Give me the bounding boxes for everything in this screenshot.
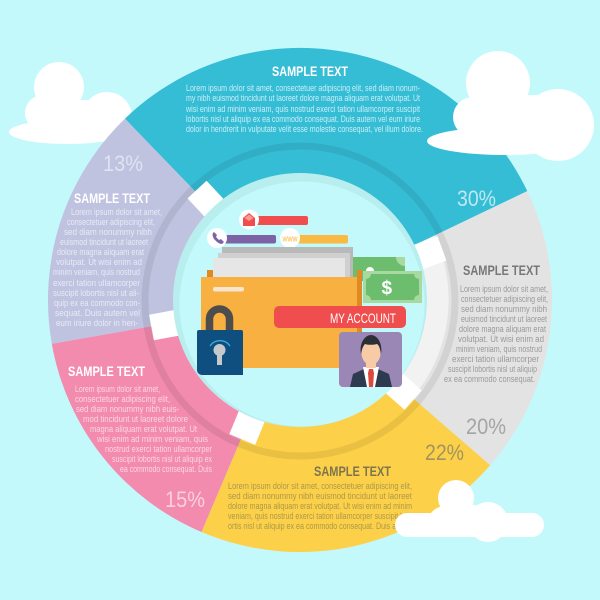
icon: banknotes: $ — [382, 278, 392, 299]
percentage: 22%: 22% — [425, 440, 464, 465]
text block: yellow panel: sed diam nonummy nibh euismod tincidunt ut laoreet — [228, 491, 412, 501]
text block: pink panel: wisi enim ad minim veniam, quis — [96, 434, 208, 444]
heading: lavender panel: SAMPLE TEXT — [74, 190, 150, 206]
heading: grey panel: SAMPLE TEXT — [463, 262, 540, 278]
icon: papers — [213, 247, 353, 277]
avatar — [339, 332, 402, 387]
text block: grey panel: consectetuer adipiscing elit, — [461, 294, 548, 304]
text block: grey panel: suscipit lobortis nisl ut aliquip — [448, 364, 537, 374]
inner ring with tabs — [145, 146, 455, 456]
text block: lavender panel — [53, 207, 162, 328]
text block: grey panel: dolore magna aliquam erat — [459, 324, 546, 334]
text block: teal panel: dolor in hendrerit in vulputate velit esse molestie consequat, vel illum dolore. — [186, 124, 423, 134]
text block: teal panel — [185, 83, 423, 134]
heading: teal panel: SAMPLE TEXT — [272, 63, 348, 79]
text block: teal panel: wisi enim ad minim veniam, quis nostrud exerci tation ullamcorper suscipit — [185, 104, 420, 114]
text block: pink panel: sed diam nonummy nibh euis- — [76, 404, 179, 414]
text block: yellow panel: Lorem ipsum dolor sit amet, consectetuer adipiscing elit, — [228, 481, 412, 491]
text block: teal panel: my nibh euismod tincidunt ut laoreet dolore magna aliquam erat volutpat. Ut — [186, 93, 420, 103]
text block: grey panel: Lorem ipsum dolor sit amet, — [460, 284, 548, 294]
panel: pink 15% — [52, 300, 300, 532]
text block: grey panel: minim veniam, quis nostrud — [456, 344, 542, 354]
text block: lavender panel: minim veniam, quis nostrud — [53, 267, 140, 277]
icon: phone label — [207, 228, 276, 248]
heading: yellow panel: SAMPLE TEXT — [314, 463, 391, 479]
text block: lavender panel: dolore magna aliquam erat — [57, 247, 144, 257]
text block: grey panel: euismod tincidunt ut laoreet — [461, 314, 547, 324]
text block: yellow panel: veniam, quis nostrud exerci tation ullamcorper suscipit lob- — [228, 511, 412, 521]
percentage: 15%: 15% — [165, 487, 205, 512]
icon: envelope label — [239, 210, 308, 230]
text block: grey panel: volutpat. Ut wisi enim ad — [458, 334, 544, 344]
text block: lavender panel: Lorem ipsum dolor sit amet, — [71, 207, 162, 217]
text block: teal panel: lobortis nisl ut aliquip ex ea commodo consequat. Duis autem vel eum iriure — [186, 114, 420, 124]
text block: lavender panel: suscipit lobortis nisl ut ali- — [53, 288, 139, 298]
cloud: top left — [9, 62, 132, 144]
text block: pink panel: mod tincidunt ut laoreet dolore — [83, 414, 188, 424]
text block: pink panel: nostrud exerci tation ullamcorper — [105, 444, 212, 454]
text block: pink panel: suscipit lobortis nisl ut aliquip ex — [112, 454, 212, 464]
percentage: 30%: 30% — [457, 186, 496, 211]
text block: lavender panel: euismod tincidunt ut laoreet — [60, 237, 148, 247]
panel: lavender 13% — [48, 119, 300, 344]
panel: grey 20% — [300, 191, 552, 465]
text block: lavender panel: sed diam nonummy nibh — [64, 227, 152, 237]
percentage: 20%: 20% — [466, 414, 506, 439]
icon: folder — [201, 270, 362, 368]
text block: grey panel: sed diam nonummy nibh — [461, 304, 547, 314]
my account banner: MY ACCOUNT — [330, 310, 396, 326]
text block: lavender panel: consectetuer adipiscing elit, — [67, 217, 155, 227]
text block: lavender panel: quip ex ea commodo con- — [54, 298, 140, 308]
text block: lavender panel: eum iriure dolor in hen- — [56, 318, 138, 328]
text block: grey panel: ex ea commodo consequat. — [444, 374, 535, 384]
my account banner — [274, 306, 406, 328]
text block: teal panel: Lorem ipsum dolor sit amet, consectetuer adipiscing elit, sed diam nonum- — [186, 83, 420, 93]
text block: yellow panel: dolore magna aliquam erat volutpat. Ut wisi enim ad minim — [228, 501, 412, 511]
text block: yellow panel — [228, 481, 412, 531]
panel: yellow 22% — [202, 300, 490, 552]
icon: www label — [280, 228, 348, 248]
text block: lavender panel: exerci tation ullamcorper — [53, 278, 140, 288]
icon: padlock — [197, 309, 243, 375]
icon: www label: www — [282, 234, 298, 244]
panel: teal 30% — [125, 48, 527, 300]
cloud: top right — [427, 51, 594, 161]
text block: pink panel: ea commodo consequat. Duis — [120, 464, 212, 474]
text block: grey panel — [444, 284, 548, 384]
cloud: bottom right — [395, 480, 544, 542]
text block: pink panel: magna aliquam erat volutpat. Ut — [90, 424, 197, 434]
text block: lavender panel: volutpat. Ut wisi enim ad — [56, 257, 142, 267]
text block: yellow panel: ortis nisl ut aliquip ex ea commodo consequat. Duis autem — [228, 521, 412, 531]
text block: pink panel: consectetuer adipiscing elit, — [75, 394, 170, 404]
text block: lavender panel: sequat. Duis autem vel — [55, 308, 140, 318]
percentage: 13%: 13% — [103, 151, 143, 176]
text block: pink panel: Lorem ipsum dolor sit amet, — [75, 384, 160, 394]
heading: pink panel: SAMPLE TEXT — [68, 363, 145, 379]
text block: grey panel: exerci tation ullamcorper — [452, 354, 539, 364]
icon: banknotes — [353, 257, 422, 303]
text block: pink panel — [75, 384, 212, 474]
